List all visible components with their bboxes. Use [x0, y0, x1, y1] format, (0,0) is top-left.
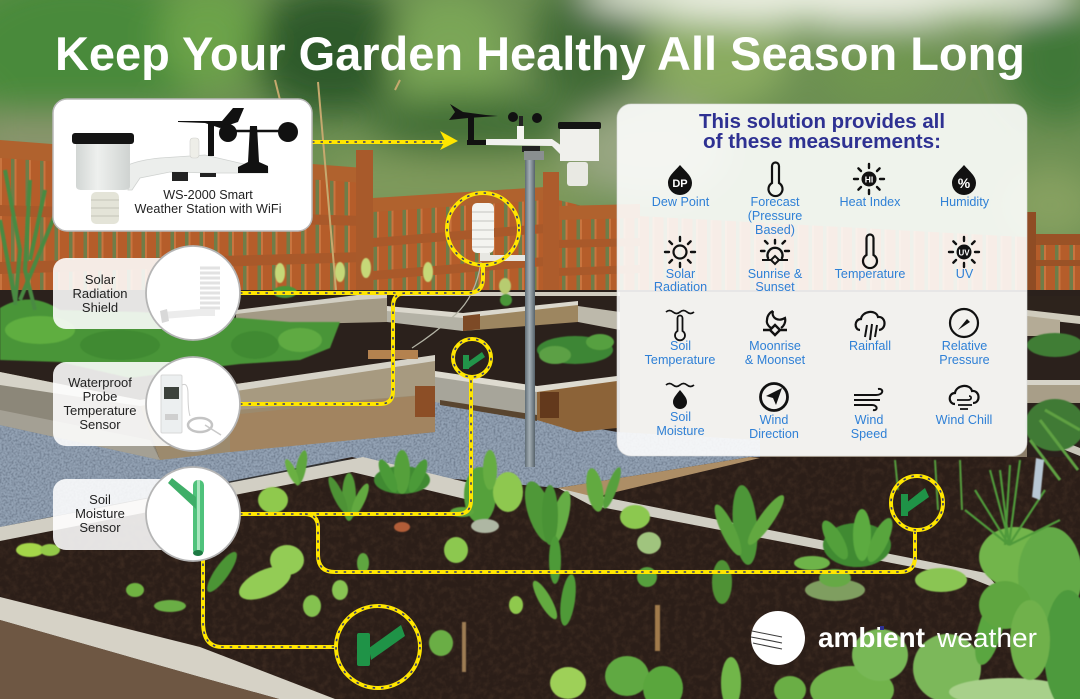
- panel: Waterproof Probe Temperature Sensor: [53, 357, 240, 451]
- heading: of these measurements:: [703, 130, 941, 153]
- measurement: Solar Radiation: Solar: [666, 267, 695, 281]
- gravel: [0, 402, 760, 527]
- measurement: Moonrise and Moonset: Moonrise: [749, 339, 801, 353]
- connector lines: [203, 131, 915, 647]
- measurement: UV: UV: [958, 248, 970, 258]
- measurement: Wind Direction: Wind: [760, 413, 788, 427]
- measurement: Moonrise and Moonset: [745, 311, 806, 367]
- product photo: weather station: [72, 108, 298, 224]
- measurement: Wind Direction: Direction: [749, 427, 799, 441]
- measurement: UV: UV: [956, 267, 974, 281]
- logo: ambient weather: weather: [936, 623, 1037, 653]
- measurement: Forecast: Forecast: [750, 195, 800, 209]
- measurement: Temperature: Temperature: [835, 267, 905, 281]
- measurement: Wind Speed: Wind: [855, 413, 883, 427]
- icon: soil sensor: [168, 478, 204, 556]
- raised beds and gravel: [0, 290, 1080, 540]
- panel: Soil Moisture Sensor: [53, 467, 240, 561]
- measurement: Solar Radiation: Radiation: [654, 280, 707, 294]
- heading: [699, 110, 945, 153]
- beds behind measurement panel: [620, 292, 1027, 457]
- back spinach bed and garlic: [0, 170, 1080, 451]
- front raised beds: [0, 432, 1080, 699]
- measurement: Relative Pressure: [939, 309, 990, 367]
- measurement: Soil Moisture: Moisture: [656, 424, 705, 438]
- measurement: Solar Radiation: [654, 237, 707, 294]
- measurement: Soil Temperature: Temperature: [645, 353, 715, 367]
- weather station mounted on pole: [449, 104, 601, 186]
- panel: WS-2000 weather station: Weather Station with WiFi: [134, 202, 282, 216]
- logo: ambient weather: ambient: [818, 622, 925, 653]
- measurement: Relative Pressure: Pressure: [939, 353, 990, 367]
- measurement: Forecast: [748, 162, 802, 237]
- measurement: Heat Index: Heat Index: [840, 195, 901, 209]
- measurement: Heat Index: [840, 164, 901, 209]
- measurement: Dew Point: Dew Point: [652, 195, 710, 209]
- measurement: Humidity: Humidity: [940, 195, 990, 209]
- logo: ambient weather: [751, 611, 1037, 665]
- title: Keep Your Garden Healthy All Season Long: [55, 27, 1025, 80]
- panel: Soil Moisture Sensor: Sensor: [79, 520, 121, 535]
- measurement: Forecast: (Pressure: [748, 209, 802, 223]
- seedlings: [16, 410, 1080, 699]
- panel: Solar Radiation Shield: [53, 246, 240, 340]
- heading: This solution provides all: [699, 110, 945, 133]
- label: product name: WS-2000 Smart: [163, 188, 253, 202]
- right bed behind panel: [1027, 296, 1080, 310]
- measurement: Soil Temperature: Soil: [670, 339, 691, 353]
- panel: WS-2000 weather station: [53, 99, 312, 231]
- measurement: Heat Index: HI: [865, 174, 873, 184]
- panel: Solar Radiation Shield: Radiation: [73, 286, 127, 301]
- label: solar radiation shield: Solar: [85, 272, 116, 287]
- label: probe sensor: Waterproof: [68, 375, 132, 390]
- measurement: Soil Moisture: [656, 384, 705, 438]
- measurement: Sunrise and Sunset: Sunrise &: [748, 267, 803, 281]
- sensor circle: soil sensor right bed: [891, 476, 943, 530]
- pole: [525, 155, 535, 467]
- measurement: Dew Point: [652, 165, 710, 209]
- icon: probe sensor: [161, 375, 221, 435]
- sensor circle: soil sensor rear bed: [453, 339, 491, 377]
- measurement: Sunrise and Sunset: Sunset: [755, 280, 795, 294]
- panel: measurements: [617, 104, 1027, 456]
- measurement: Humidity: %: [958, 175, 971, 191]
- label: soil sensor: Soil: [89, 492, 111, 507]
- measurement: Temperature: [835, 234, 905, 281]
- probe cable: [412, 262, 481, 348]
- icon: radiation shield: [160, 268, 220, 323]
- far beds: [236, 296, 387, 328]
- measurement: Moonrise and Moonset: & Moonset: [745, 353, 806, 367]
- measurement: Rainfall: Rainfall: [849, 339, 891, 353]
- measurement: Wind Chill: Wind Chill: [936, 413, 992, 427]
- measurement: Sunrise and Sunset: [748, 240, 803, 294]
- sensor circle: soil sensor front bed: [336, 606, 420, 688]
- panel: Waterproof Probe Temperature Sensor: Temperature: [64, 403, 136, 418]
- sensor circle: radiation shield in place: [447, 193, 525, 265]
- measurement: Dew Point: DP: [672, 178, 688, 190]
- measurement: UV: [949, 237, 979, 281]
- wooden fence: [0, 80, 1080, 296]
- measurement: Rainfall: [849, 312, 891, 353]
- measurement: Forecast: Based): [755, 223, 795, 237]
- measurement: Humidity: [940, 165, 990, 209]
- measurement: Wind Direction: [749, 384, 799, 441]
- stakes: [275, 80, 400, 290]
- measurement: Relative Pressure: Relative: [942, 339, 987, 353]
- panel: Waterproof Probe Temperature Sensor: Sensor: [79, 417, 121, 432]
- measurement: Wind Chill: [936, 386, 992, 427]
- measurement: Soil Moisture: Soil: [670, 410, 691, 424]
- center bed: [435, 373, 537, 420]
- panel: Waterproof Probe Temperature Sensor: Probe: [83, 389, 117, 404]
- measurement: Wind Speed: Speed: [851, 427, 887, 441]
- foliage: [0, 170, 1080, 699]
- panel: Solar Radiation Shield: Shield: [82, 300, 118, 315]
- blurred trees: [0, 0, 1080, 300]
- measurement: Wind Speed: [851, 389, 887, 441]
- panel: Soil Moisture Sensor: Moisture: [75, 506, 125, 521]
- near-left bed: [0, 373, 160, 460]
- measurement: Soil Temperature: [645, 310, 715, 367]
